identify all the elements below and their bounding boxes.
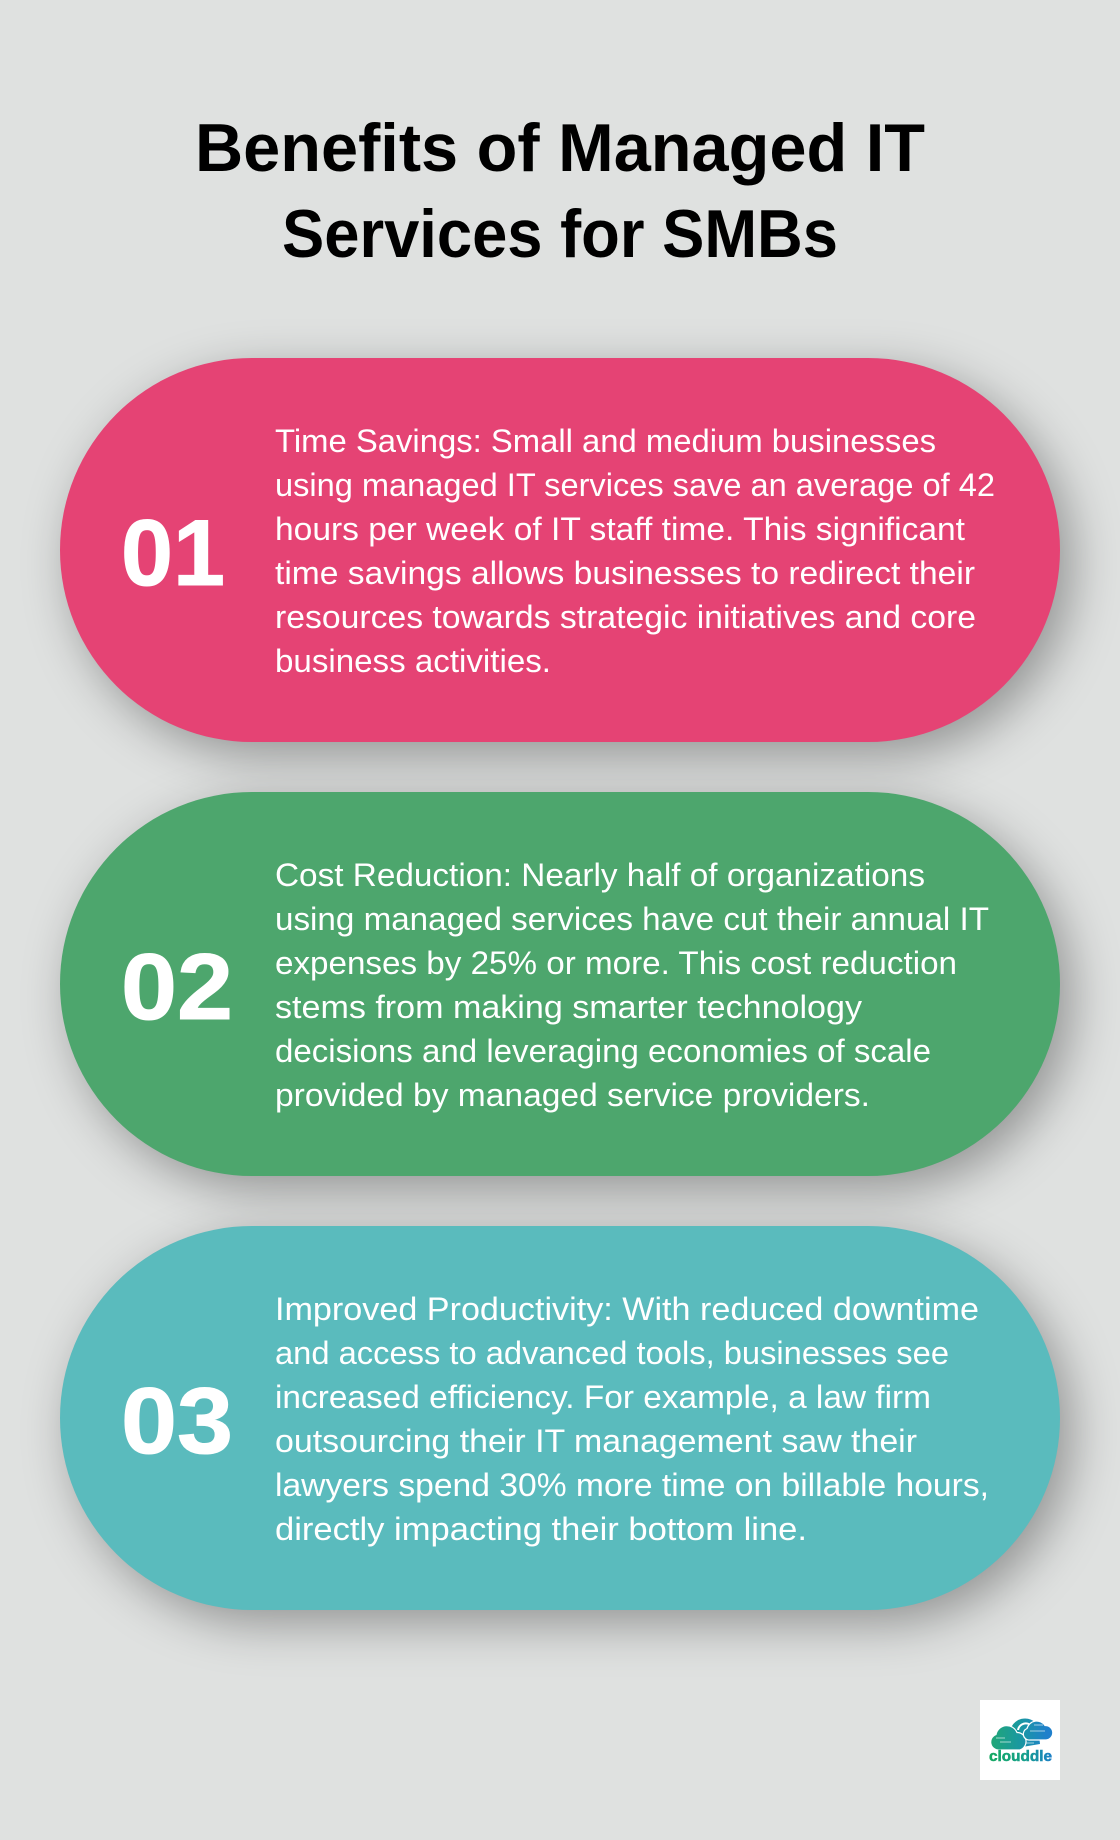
text: time savings: business activities. xyxy=(275,643,551,679)
number 02: 02 xyxy=(121,934,233,1039)
text: cost reduction: stems from making smarter technology xyxy=(275,989,863,1025)
text: time savings: hours per week of IT staff time. This significant xyxy=(275,511,965,547)
text: improved productivity: outsourcing their IT management saw their xyxy=(275,1423,917,1459)
logo: clouddle: clouddle xyxy=(989,1749,1052,1765)
panel: cost reduction xyxy=(60,792,1060,1176)
panel: improved productivity xyxy=(60,1226,1060,1610)
text: improved productivity: directly impacting their bottom line. xyxy=(275,1511,807,1547)
text: cost reduction: provided by managed service providers. xyxy=(275,1077,870,1113)
text: time savings: Time Savings: Small and medium businesses xyxy=(275,423,936,459)
text: time savings: using managed IT services save an average of 42 xyxy=(275,467,995,503)
text: improved productivity: Improved Productivity: With reduced downtime xyxy=(275,1291,979,1327)
logo: clouddle xyxy=(980,1700,1060,1780)
text: cost reduction: decisions and leveraging economies of scale xyxy=(275,1033,931,1069)
title: Benefits of Managed IT xyxy=(195,110,925,186)
text: cost reduction: Cost Reduction: Nearly half of organizations xyxy=(275,857,925,893)
number 01: 01 xyxy=(121,500,225,605)
text: improved productivity xyxy=(275,1291,989,1547)
text: time savings: resources towards strategic initiatives and core xyxy=(275,599,976,635)
text: cost reduction xyxy=(275,857,989,1113)
text: cost reduction: using managed services have cut their annual IT xyxy=(275,901,989,937)
number 03: 03 xyxy=(121,1368,233,1473)
text: improved productivity: increased efficiency. For example, a law firm xyxy=(275,1379,931,1415)
panel: time savings xyxy=(60,358,1060,742)
text: improved productivity: lawyers spend 30% more time on billable hours, xyxy=(275,1467,989,1503)
title: Services for SMBs xyxy=(282,196,838,272)
text: time savings xyxy=(275,423,995,679)
text: cost reduction: expenses by 25% or more. This cost reduction xyxy=(275,945,957,981)
text: improved productivity: and access to advanced tools, businesses see xyxy=(275,1335,949,1371)
title xyxy=(195,110,925,272)
text: time savings: time savings allows businesses to redirect their xyxy=(275,555,975,591)
